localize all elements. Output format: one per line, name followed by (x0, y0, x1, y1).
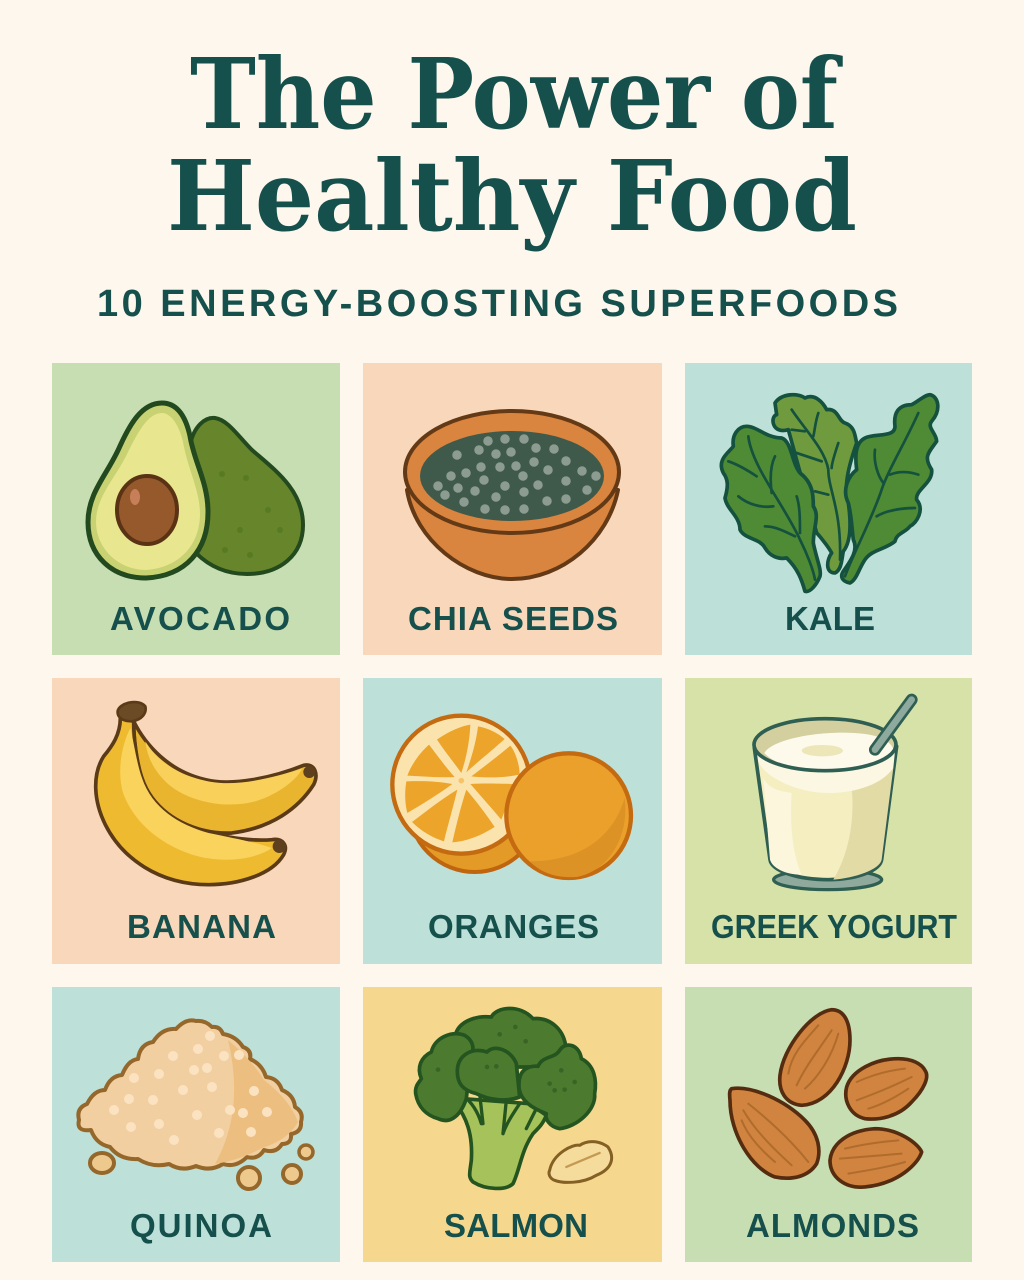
panel: avocado (52, 363, 340, 655)
icon: oranges (392, 716, 631, 878)
title: The Power of (190, 37, 843, 151)
panel: quinoa (52, 987, 340, 1262)
subtitle: 10 ENERGY-BOOSTING SUPERFOODS (97, 283, 898, 325)
label: ALMONDS (746, 1207, 919, 1244)
label: SALMON (444, 1207, 588, 1244)
icon: avocado (88, 403, 303, 578)
label: QUINOA (130, 1207, 272, 1244)
panel: salmon (363, 987, 662, 1262)
title (167, 37, 857, 253)
icon: almonds (730, 1010, 927, 1187)
panel: kale (685, 363, 972, 655)
label: ORANGES (428, 908, 599, 945)
panel: oranges (363, 678, 662, 964)
icon: kale leaves (721, 395, 938, 592)
icon: broccoli and seed (416, 1008, 612, 1188)
label: GREEK YOGURT (711, 908, 957, 945)
label: BANANA (127, 908, 276, 945)
panel: almonds (685, 987, 972, 1262)
panel: banana (52, 678, 340, 964)
panel: greek yogurt (685, 678, 972, 964)
icon: bananas (96, 702, 316, 885)
title: Healthy Food (167, 139, 857, 253)
icon: yogurt glass with spoon (754, 700, 912, 890)
icon: quinoa pile (78, 1020, 313, 1189)
label: AVOCADO (110, 600, 290, 637)
label: KALE (785, 600, 875, 637)
label: CHIA SEEDS (408, 600, 618, 637)
icon: chia seeds bowl (405, 411, 619, 579)
panel: chia seeds (363, 363, 662, 655)
